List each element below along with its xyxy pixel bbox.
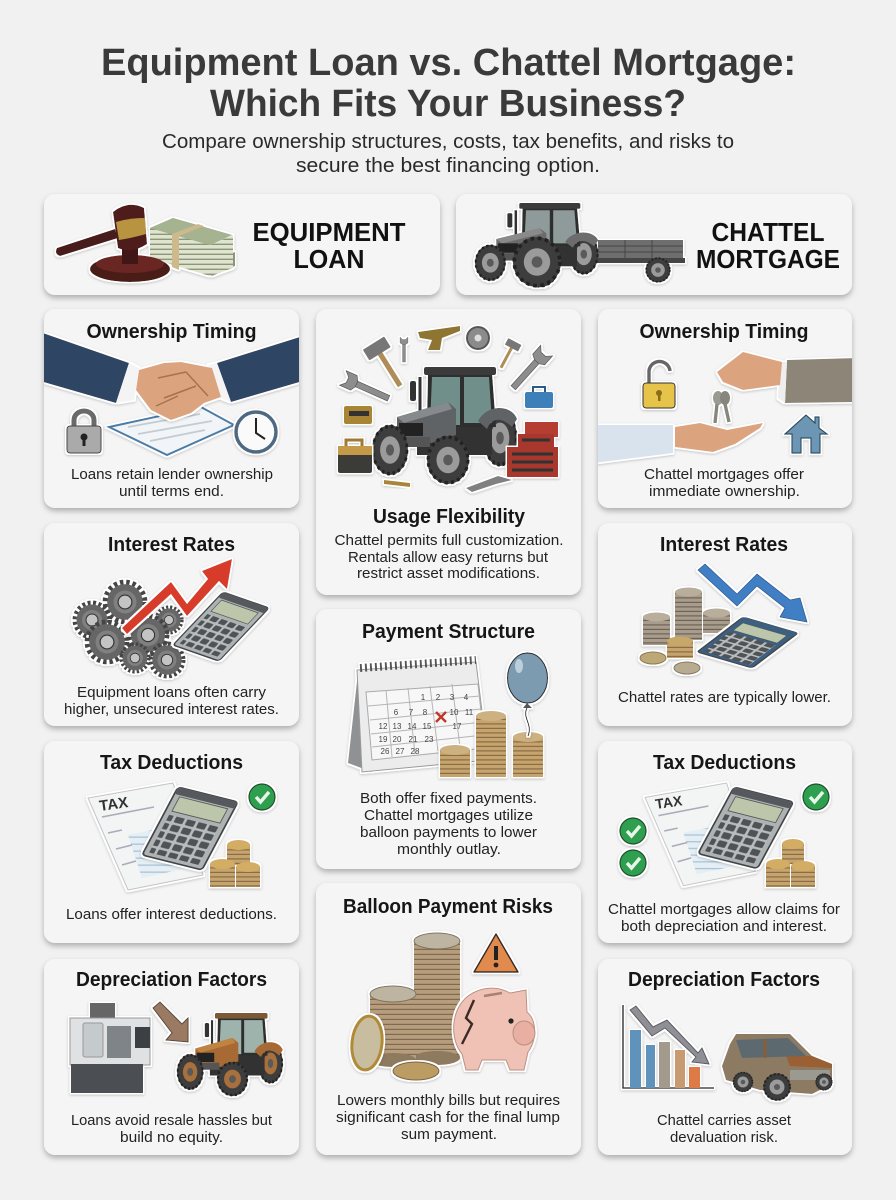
text — [64, 685, 279, 718]
text — [334, 533, 564, 582]
text: Loans retain lender ownership — [71, 467, 273, 483]
icon: calendar — [348, 660, 488, 772]
text: monthly outlay. — [397, 842, 501, 858]
icon: cracked piggy bank — [454, 988, 535, 1070]
panel: depreciation factors (chattel) — [598, 959, 852, 1155]
icon: tax form: TAX — [654, 792, 684, 812]
icon: warning — [474, 934, 518, 972]
text — [657, 1113, 791, 1146]
icon: rising arrow — [122, 559, 232, 634]
text: Loans offer interest deductions. — [66, 907, 277, 923]
title: Which Fits Your Business? — [210, 83, 686, 125]
text: restrict asset modifications. — [357, 566, 540, 582]
icon: calendar: 13 — [393, 722, 402, 731]
icon: flat coin — [393, 1062, 439, 1080]
icon: coins — [766, 839, 815, 887]
heading — [252, 217, 406, 274]
icon: handshake — [40, 332, 303, 420]
icon: falling arrow — [698, 564, 807, 622]
icon: calendar: 14 — [408, 722, 417, 731]
icon: calendar: 6 — [394, 708, 399, 717]
title — [101, 42, 796, 125]
icon: coins — [210, 840, 260, 887]
icon: tax form — [88, 783, 203, 890]
icon: calendar: 19 — [379, 735, 388, 744]
panel: usage flexibility — [316, 309, 581, 595]
icon: open padlock — [643, 361, 675, 408]
text: Chattel rates are typically lower. — [618, 690, 831, 706]
text: balloon payments to lower — [360, 825, 537, 841]
icon: rusty car — [722, 1034, 832, 1101]
panel: chattel mortgage header — [456, 194, 852, 295]
icon: calendar: 3 — [450, 693, 455, 702]
text: Both offer fixed payments. — [360, 791, 537, 807]
icon: calendar: 17 — [453, 722, 462, 731]
icon: calendar: 21 — [409, 735, 418, 744]
text: Loans avoid resale hassles but — [71, 1113, 272, 1129]
text — [644, 467, 804, 500]
text: until terms end. — [119, 484, 224, 500]
text — [608, 902, 840, 935]
icon: padlock — [67, 411, 101, 453]
icon: calendar: 4 — [464, 693, 469, 702]
panel: tax deductions (loan) — [44, 741, 299, 943]
icon: rusty tractor — [177, 1013, 283, 1096]
icon: calculator — [142, 787, 238, 870]
icon: calendar: 20 — [393, 735, 402, 744]
heading: MORTGAGE — [696, 244, 840, 274]
icon: tractor and tools — [338, 326, 558, 492]
heading: EQUIPMENT — [252, 217, 406, 247]
text: Chattel carries asset — [657, 1113, 791, 1129]
icon: clock — [236, 412, 276, 452]
icon: coin stacks — [640, 588, 730, 674]
icon: calendar: 26 — [381, 747, 390, 756]
heading: Interest Rates — [660, 534, 788, 556]
text — [360, 791, 537, 858]
heading: Ownership Timing — [86, 321, 256, 343]
icon: calendar: 28 — [411, 747, 420, 756]
text — [71, 1113, 272, 1146]
icon: contract — [109, 407, 234, 455]
icon: checks — [620, 784, 829, 876]
icon: gears — [75, 582, 183, 676]
heading: Payment Structure — [362, 621, 535, 643]
heading: Tax Deductions — [100, 752, 243, 774]
text: higher, unsecured interest rates. — [64, 702, 279, 718]
text: Chattel mortgages utilize — [364, 808, 533, 824]
text: significant cash for the final lump — [336, 1110, 560, 1126]
icon: tractor with trailer — [475, 203, 685, 287]
text: devaluation risk. — [670, 1130, 778, 1146]
icon: balloon — [508, 653, 548, 736]
text: Rentals allow easy returns but — [348, 550, 548, 566]
icon: hands and keys — [594, 352, 856, 463]
panel: interest rates (loan) — [44, 523, 299, 726]
icon: calendar: 2 — [436, 693, 441, 702]
icon: calendar: 10 — [450, 708, 459, 717]
icon: calendar: 1 — [421, 693, 426, 702]
icon: gavel and money — [56, 205, 235, 282]
heading: CHATTEL — [712, 217, 825, 247]
icon: tax form — [645, 783, 755, 886]
text: Equipment loans often carry — [77, 685, 267, 701]
panel: tax deductions (chattel) — [598, 741, 852, 943]
text: Chattel mortgages offer — [644, 467, 804, 483]
subtitle — [162, 131, 734, 177]
text: both depreciation and interest. — [621, 919, 827, 935]
panel: depreciation factors (loan) — [44, 959, 299, 1155]
panel: payment structure — [316, 609, 581, 869]
icon: calculator — [697, 617, 798, 668]
heading: Interest Rates — [108, 534, 235, 556]
text — [336, 1093, 560, 1143]
chart: declining bars — [623, 1005, 714, 1088]
panel: equipment loan header — [44, 194, 440, 295]
panel: ownership timing (chattel) — [594, 309, 856, 508]
panel: balloon payment risks — [316, 883, 581, 1155]
icon: calendar: 12 — [379, 722, 388, 731]
heading: Ownership Timing — [640, 321, 808, 343]
icon: calendar: 15 — [423, 722, 432, 731]
icon: calendar: 11 — [465, 708, 474, 717]
text: Chattel mortgages allow claims for — [608, 902, 840, 918]
panel: interest rates (chattel) — [598, 523, 852, 726]
heading: LOAN — [294, 244, 364, 274]
subtitle: Compare ownership structures, costs, tax benefits, and risks to — [162, 131, 734, 153]
title: Equipment Loan vs. Chattel Mortgage: — [101, 42, 796, 84]
heading: Tax Deductions — [653, 752, 796, 774]
icon: CNC machine — [70, 1003, 150, 1093]
icon: calendar: 27 — [396, 747, 405, 756]
icon: arrow down — [153, 1002, 188, 1042]
heading: Balloon Payment Risks — [343, 896, 553, 918]
subtitle: secure the best financing option. — [296, 155, 600, 177]
icon: tall coin stacks — [370, 933, 460, 1067]
heading: Depreciation Factors — [628, 969, 820, 991]
heading: Usage Flexibility — [373, 506, 526, 528]
icon: calculator — [173, 592, 269, 661]
text: Chattel permits full customization. — [334, 533, 564, 549]
icon: house — [785, 415, 827, 453]
icon: calculator — [698, 787, 794, 869]
panel: ownership timing (loan) — [40, 309, 303, 508]
icon: tax form: TAX — [98, 794, 129, 815]
text: sum payment. — [401, 1127, 497, 1143]
icon: tilted coin — [349, 1015, 385, 1071]
text: build no equity. — [120, 1130, 223, 1146]
heading — [696, 217, 840, 274]
text: immediate ownership. — [649, 484, 800, 500]
text: Lowers monthly bills but requires — [337, 1093, 560, 1109]
icon: calendar: 8 — [423, 708, 428, 717]
heading: Depreciation Factors — [76, 969, 267, 991]
icon: calendar: 7 — [409, 708, 414, 717]
icon: check — [249, 784, 275, 810]
icon: calendar: 23 — [425, 735, 434, 744]
text — [71, 467, 273, 500]
icon: coin stacks — [440, 711, 543, 777]
